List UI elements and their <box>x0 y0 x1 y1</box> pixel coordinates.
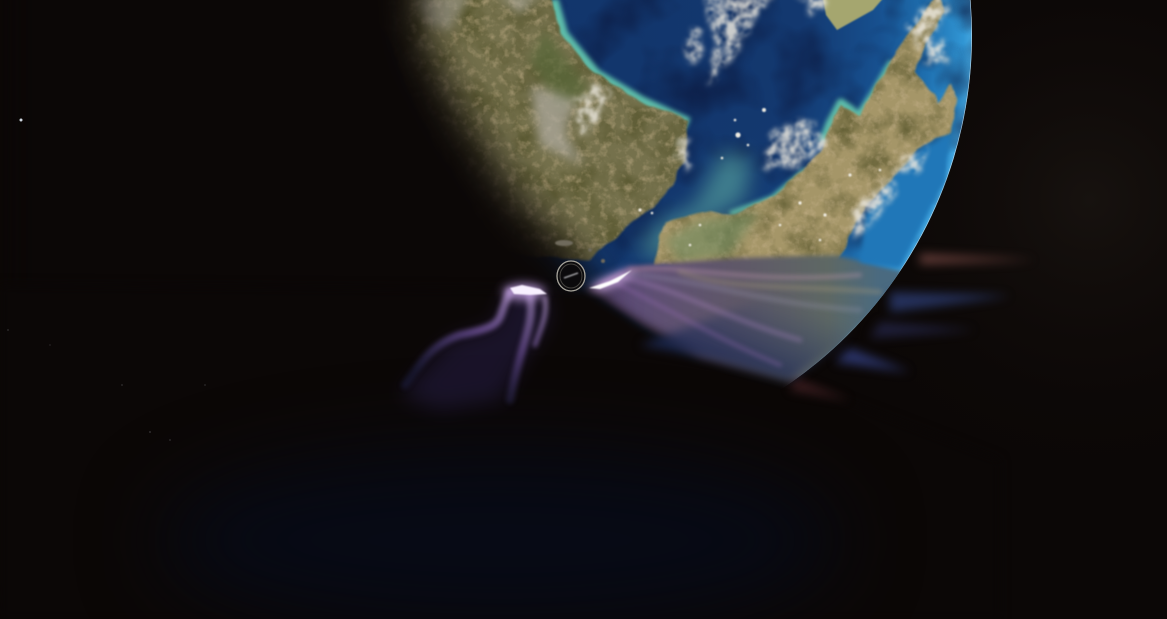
stars <box>7 118 206 441</box>
land tone: greener coast <box>665 212 760 262</box>
clouds <box>572 0 948 235</box>
streaks: behind right limb <box>790 254 1035 400</box>
lower ocean <box>860 135 950 268</box>
landmass: left continent <box>370 0 687 260</box>
plasma flare: right <box>588 268 880 380</box>
ocean <box>543 0 972 382</box>
cloud: grey band left <box>415 0 585 165</box>
atmosphere rim <box>791 0 972 382</box>
lower land with haze <box>585 255 905 390</box>
small islands <box>638 108 881 246</box>
planet <box>393 0 972 386</box>
island: north <box>822 0 886 30</box>
plasma flare: left <box>400 284 550 410</box>
debris near craft <box>555 240 605 263</box>
ringed craft <box>557 261 585 291</box>
turbid water plume <box>636 152 752 262</box>
shallow water: turquoise shelves <box>552 0 893 214</box>
landmass: right peninsula <box>655 0 958 275</box>
